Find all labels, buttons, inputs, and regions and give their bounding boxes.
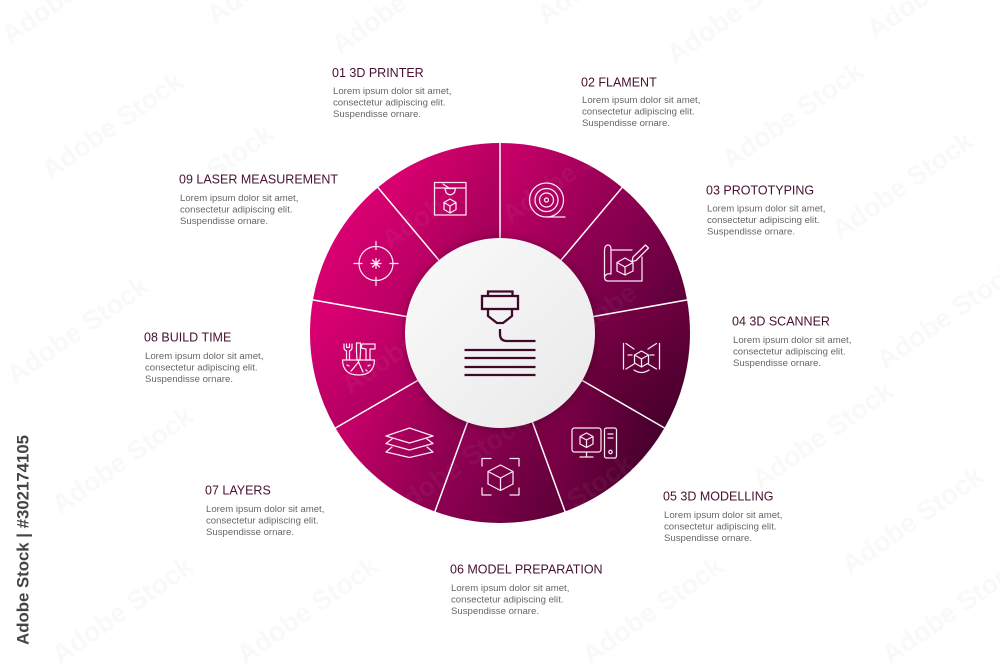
text block: consectetur adipiscing elit. <box>664 522 777 532</box>
text block: Lorem ipsum dolor sit amet, <box>733 335 851 346</box>
ring chart <box>310 143 690 523</box>
text block: Suspendisse ornare. <box>707 226 795 238</box>
text block: Suspendisse ornare. <box>733 358 821 369</box>
text block: Lorem ipsum dolor sit amet, <box>707 204 825 214</box>
text block: consectetur adipiscing elit. <box>206 516 319 526</box>
heading: 01 3D PRINTER <box>332 66 424 80</box>
text block: consectetur adipiscing elit. <box>333 98 446 108</box>
item 08 <box>144 330 263 385</box>
background watermark: Adobe Stock <box>836 460 989 580</box>
text block: Lorem ipsum dolor sit amet, <box>451 583 569 594</box>
item 05 <box>663 490 782 544</box>
ring watermark: Adobe <box>556 277 642 350</box>
text block: consectetur adipiscing elit. <box>451 594 564 606</box>
text block: consectetur adipiscing elit. <box>180 204 293 216</box>
background watermark: Adobe Stock <box>46 550 199 667</box>
background watermark: Stock <box>201 118 279 185</box>
text block: consectetur adipiscing elit. <box>707 215 820 226</box>
center circle <box>405 238 595 428</box>
center circle shadow <box>404 238 596 430</box>
icon: build time tools <box>342 343 375 375</box>
background watermark: Adobe Stock <box>746 375 899 495</box>
item 03 <box>706 184 825 238</box>
icon: 3D modelling computer <box>572 428 616 458</box>
segment 8 <box>310 300 418 428</box>
text block: Lorem ipsum dolor sit amet, <box>582 95 700 106</box>
segment 2 <box>500 143 622 260</box>
text block: consectetur adipiscing elit. <box>733 346 846 358</box>
text block: Lorem ipsum dolor sit amet, <box>180 193 298 204</box>
text block: Suspendisse ornare. <box>206 527 294 538</box>
text block: Suspendisse ornare. <box>145 374 233 385</box>
ring watermark: Adobe Stock <box>496 110 649 230</box>
segment 1 <box>378 143 500 260</box>
text block: Lorem ipsum dolor sit amet, <box>333 86 451 97</box>
background watermark: Adobe Stock <box>231 550 384 667</box>
ring watermark: Adobe <box>336 327 422 400</box>
ring watermark <box>336 110 649 525</box>
text block: Suspendisse ornare. <box>333 109 421 120</box>
heading: 07 LAYERS <box>205 484 271 498</box>
icon: layers <box>386 428 433 458</box>
item 07 <box>205 484 324 538</box>
heading: 04 3D SCANNER <box>732 314 830 328</box>
icon: laser measurement <box>354 242 398 286</box>
icon: filament spool <box>530 183 565 217</box>
ring watermark: Adobe Stock <box>381 405 534 525</box>
text block: Lorem ipsum dolor sit amet, <box>145 351 263 362</box>
text block: Suspendisse ornare. <box>664 533 752 544</box>
segment dividers <box>312 142 688 512</box>
background watermark: Adobe Stock <box>716 55 869 175</box>
heading: 09 LASER MEASUREMENT <box>179 172 338 186</box>
background watermark: Adobe Stock <box>36 65 189 185</box>
icon: 3D printer <box>434 182 466 215</box>
background watermark: Adobe Stock <box>1 270 154 390</box>
item 02 <box>581 76 700 129</box>
segment 3 <box>561 188 687 316</box>
item 04 <box>732 314 851 369</box>
segment 9 <box>313 188 439 316</box>
text block: Suspendisse ornare. <box>582 118 670 129</box>
ring watermark: Stock <box>561 448 639 515</box>
segment 5 <box>532 380 664 512</box>
segment 7 <box>336 380 468 512</box>
heading: 05 3D MODELLING <box>663 490 773 504</box>
background watermark: Adobe Stock <box>576 550 729 667</box>
text block: Lorem ipsum dolor sit amet, <box>664 510 782 521</box>
text block: Lorem ipsum dolor sit amet, <box>206 504 324 515</box>
icon: 3D scanner <box>624 344 660 372</box>
text block: consectetur adipiscing elit. <box>145 362 258 374</box>
icon: 3D print nozzle <box>464 292 536 375</box>
segment 4 <box>582 300 690 428</box>
text block: Suspendisse ornare. <box>180 216 268 227</box>
icon: model preparation <box>482 458 519 495</box>
item 01 <box>332 66 451 120</box>
background watermark: Adobe Stock <box>46 400 199 520</box>
icon: blueprint prototyping <box>604 245 648 281</box>
text block: consectetur adipiscing elit. <box>582 106 695 118</box>
background watermark: Adobe Stock <box>826 125 979 245</box>
text block: Suspendisse ornare. <box>451 606 539 617</box>
segment 6 <box>435 422 565 523</box>
heading: 08 BUILD TIME <box>144 330 231 344</box>
item 06 <box>450 562 603 617</box>
ring watermark: Adobe <box>376 182 462 255</box>
item 09 <box>179 172 338 227</box>
heading: 06 MODEL PREPARATION <box>450 562 603 576</box>
stock id label: Adobe Stock | #302174105 <box>14 435 32 645</box>
heading: 02 FLAMENT <box>581 76 657 90</box>
heading: 03 PROTOTYPING <box>706 184 814 198</box>
